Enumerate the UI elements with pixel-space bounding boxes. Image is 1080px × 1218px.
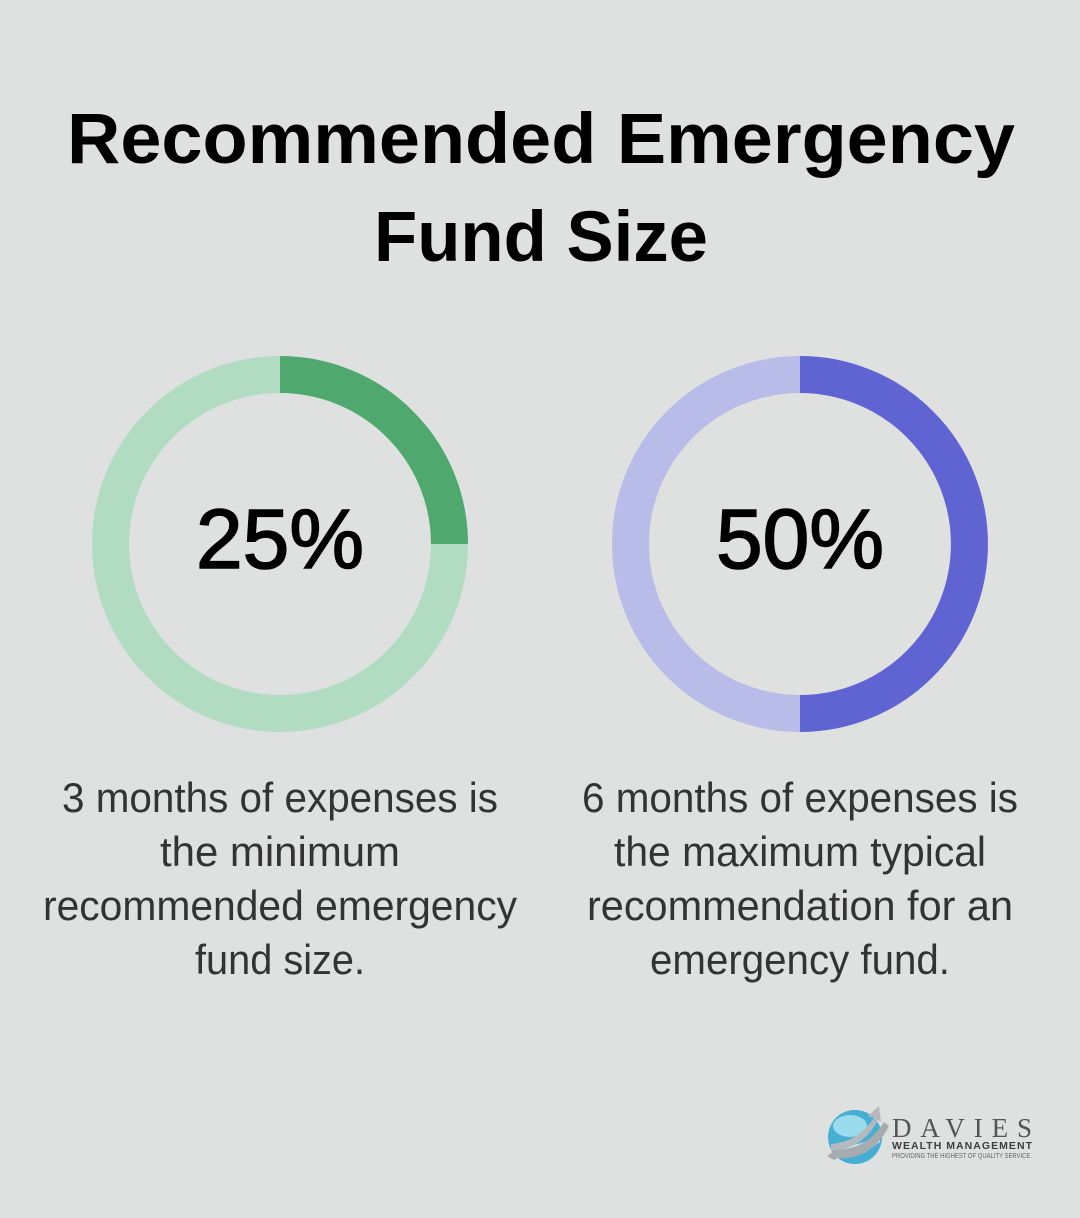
chart: 25 percent donut <box>110 374 450 714</box>
logo: Davies Wealth Management: WEALTH MANAGEMENT <box>892 1140 1033 1152</box>
text: 6 months description: emergency fund. <box>650 936 950 983</box>
text: 3 months description: recommended emergency <box>43 882 517 929</box>
text: 6 months description: the maximum typical <box>614 828 986 875</box>
stat: 25%: 25% <box>196 492 364 586</box>
title: Recommended Emergency <box>67 100 1016 179</box>
chart: 50 percent donut <box>630 374 970 714</box>
text: 3 months description: the minimum <box>160 828 400 875</box>
logo wordmark: DAVIES <box>892 1113 1032 1143</box>
text: 3 months description: fund size. <box>195 936 365 983</box>
logo: Davies Wealth Management <box>827 1106 1033 1164</box>
panel: 25 percent <box>43 374 517 983</box>
text: 3 months description: 3 months of expenses is <box>62 774 498 821</box>
panel: 50 percent <box>582 374 1018 983</box>
title: Fund Size <box>374 198 708 277</box>
stat: 50%: 50% <box>716 492 884 586</box>
text: 6 months description: recommendation for an <box>587 882 1013 929</box>
text: 3 months description <box>43 774 517 983</box>
icon: globe with arrows <box>827 1106 889 1164</box>
text: 6 months description: 6 months of expenses is <box>582 774 1018 821</box>
text: 6 months description <box>582 774 1018 983</box>
title <box>67 100 1016 277</box>
logo: Davies Wealth Management: PROVIDING THE HIGHEST OF QUALITY SERVICE. <box>892 1151 1032 1160</box>
